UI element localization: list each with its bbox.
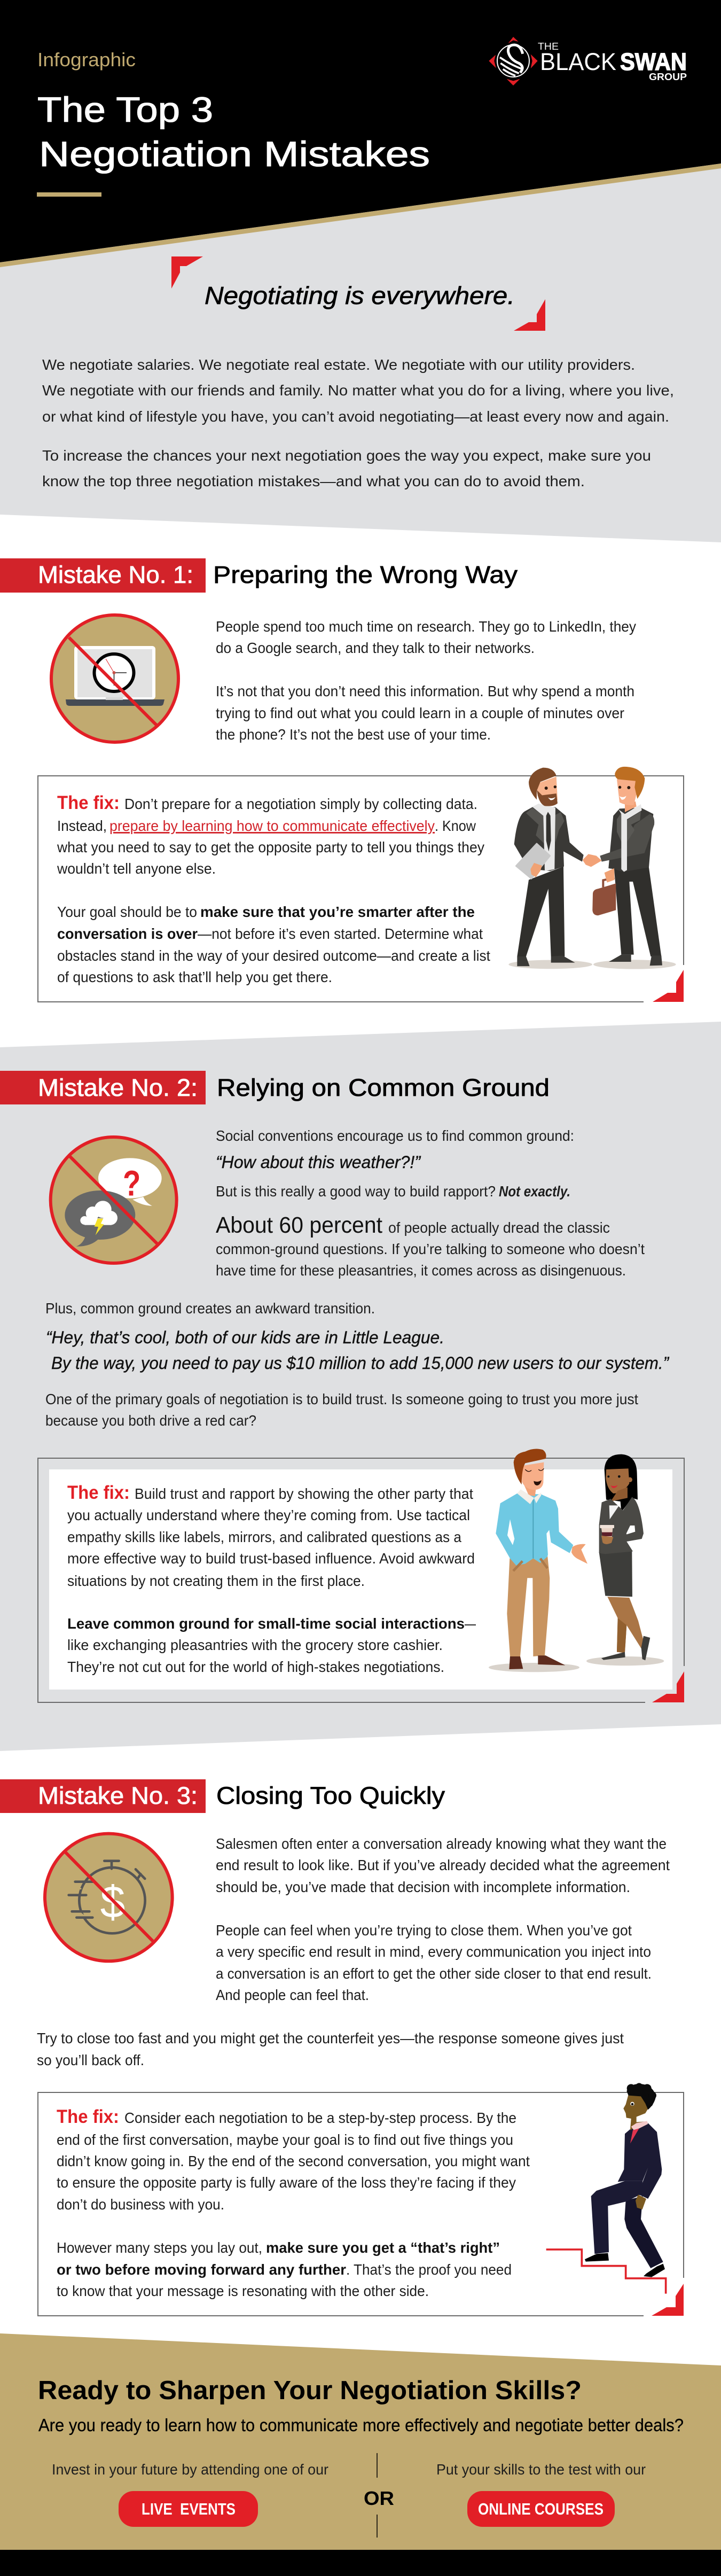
mistake 3 text: should be, you’ve made that decision with incomplete information. [216, 1879, 630, 1895]
mistake 1 text: It’s not that you don’t need this information. But why spend a month [216, 683, 634, 699]
fix 1 text [57, 792, 490, 985]
fix 1 text: obstacles stand in the way of your desired outcome—and create a list [57, 947, 490, 964]
fix 3 text: make sure you get a “that’s right” [266, 2239, 500, 2256]
mistake 3 text: Salesmen often enter a conversation already knowing what they want the [216, 1835, 667, 1852]
quote: Negotiating is everywhere: Negotiating is everywhere. [205, 282, 515, 309]
mistake 2 text: By the way, you need to pay us $10 million to add 15,000 new users to our system.” [51, 1353, 669, 1373]
intro text: know the top three negotiation mistakes—and what you can do to avoid them. [42, 473, 585, 489]
quote corner: bottom right [514, 299, 545, 331]
heading: Mistake No. 3: Closing Too Quickly [216, 1782, 445, 1809]
mistake 2 text: because you both drive a red car? [45, 1412, 256, 1429]
fix 1 text: wouldn’t tell anyone else. [57, 860, 216, 877]
mistake 3 text: a very specific end result in mind, every communication you inject into [216, 1943, 651, 1960]
panel: fix 3 [38, 2092, 684, 2316]
fix 1 text: Instead, [57, 818, 107, 834]
illustration: two businessmen shaking hands [508, 767, 676, 969]
mistake 1 text: People spend too much time on research. They go to LinkedIn, they [216, 618, 636, 635]
mistake 2 text: About 60 percent [216, 1212, 382, 1238]
fix 3 text [57, 2106, 530, 2299]
OR divider: OR [364, 2487, 394, 2509]
heading: Mistake No. 1 [0, 558, 518, 593]
logo: The Black Swan Group: BLACK [540, 48, 616, 75]
fix 3 text: The fix: [57, 2106, 119, 2127]
panel: fix 2 [38, 1458, 684, 1702]
fix 1 text: of questions to ask that’ll help you get there. [57, 969, 332, 985]
fix 3 text: to know that your message is resonating with the other side. [57, 2283, 429, 2299]
fix 3 text: end of the first conversation, maybe your goal is to find out five things you [57, 2131, 513, 2148]
icon: weather small talk crossed out [51, 1137, 177, 1263]
fix 1 text: what you need to say to get the opposite party to tell you things they [57, 839, 484, 855]
right call to action: online courses [436, 2461, 646, 2527]
title: Negotiation Mistakes [39, 134, 430, 174]
mistake 3 text: Try to close too fast and you might get the counterfeit yes—the response someone gives just [37, 2030, 624, 2046]
fix 3 text: . That’s the proof you need [346, 2261, 512, 2278]
right call to action: online courses: Put your skills to the test with our [436, 2461, 646, 2478]
illustration: man and woman talking [489, 1449, 664, 1672]
quote corner: top left [171, 256, 203, 289]
fix 1 text: Don’t prepare for a negotiation simply by collecting data. [124, 796, 477, 812]
mistake 3 text: a conversation is an effort to get the other side closer to that end result. [216, 1965, 652, 1982]
heading: Mistake No. 2 [0, 1071, 550, 1104]
fix 2 text: Build trust and rapport by showing the other party that [135, 1485, 473, 1502]
panel: fix 1 [38, 776, 684, 1002]
fix 2 text: more effective way to build trust-based influence. Avoid awkward [67, 1550, 475, 1567]
logo: The Black Swan Group [489, 37, 687, 85]
fix 1 text: The fix: [57, 792, 120, 813]
fix 1 text: . Know [435, 818, 476, 834]
heading: Mistake No. 1: Preparing the Wrong Way [213, 561, 518, 588]
title [37, 90, 430, 174]
fix 1 text: make sure that you’re smarter after the [200, 904, 475, 920]
icon: weather small talk crossed out: ? [123, 1164, 140, 1203]
mistake 1 text: do a Google search, and they talk to their networks. [216, 640, 535, 656]
mistake 2 text: “Hey, that’s cool, both of our kids are in Little League. [46, 1328, 444, 1347]
fix 2 text: Leave common ground for small-time social interactions [67, 1615, 465, 1632]
logo: The Black Swan Group: SWAN [620, 48, 687, 75]
fix 2 text: empathy skills like labels, mirrors, and calibrated questions as a [67, 1529, 461, 1545]
fix 3 text: to ensure the opposite party is fully aware of the loss they’re facing if they [57, 2174, 516, 2191]
heading: Mistake No. 2: Mistake No. 2: [38, 1074, 198, 1101]
mistake 2 text: of people actually dread the classic [388, 1219, 610, 1236]
footer bar [0, 2550, 721, 2576]
left call to action: live events: Invest in your future by attending one of our [52, 2461, 328, 2478]
fix 1 text: —not before it’s even started. Determine what [198, 925, 483, 942]
fix 3 text: don’t do business with you. [57, 2196, 224, 2213]
heading: Mistake No. 2: Relying on Common Ground [217, 1074, 550, 1101]
mistake 3 text [37, 1835, 670, 2068]
mistake 2 text [45, 1127, 669, 1429]
mistake 3 text: People can feel when you’re trying to close them. When you’ve got [216, 1922, 632, 1939]
panel: intro grey background [0, 160, 721, 542]
mistake 2 text: One of the primary goals of negotiation is to build trust. Is someone going to trust you more just [45, 1391, 638, 1407]
mistake 2 text: Plus, common ground creates an awkward transition. [45, 1300, 375, 1317]
fix 2 text: They’re not cut out for the world of high-stakes negotiations. [67, 1659, 444, 1675]
mistake 3 text: end result to look like. But if you’ve already decided what the agreement [216, 1857, 670, 1873]
mistake 2 text: common-ground questions. If you’re talking to someone who doesn’t [216, 1241, 645, 1257]
intro text: We negotiate with our friends and family. No matter what you do for a living, where you live, [42, 382, 674, 399]
heading: Mistake No. 3 [0, 1779, 445, 1813]
icon: stopwatch with dollar crossed out [45, 1834, 173, 1961]
intro text [42, 356, 674, 489]
fix 1 text: prepare by learning how to communicate effectively [109, 818, 435, 834]
left call to action: live events [52, 2461, 328, 2527]
fix 3 text: didn’t know going in. By the end of the second conversation, you might want [57, 2153, 530, 2169]
mistake 1 text: the phone? It’s not the best use of your time. [216, 726, 491, 743]
fix 2 text: you actually understand where they’re coming from. Use tactical [67, 1507, 470, 1523]
intro text: We negotiate salaries. We negotiate real estate. We negotiate with our utility providers. [42, 356, 635, 373]
header black banner [0, 0, 721, 267]
fix 1 text: conversation is over [57, 925, 198, 942]
heading: Mistake No. 3: Mistake No. 3: [38, 1782, 198, 1809]
panel: call to action gold background [0, 2333, 721, 2550]
left call to action: live events: LIVE EVENTS [142, 2500, 236, 2518]
intro text: or what kind of lifestyle you have, you can’t avoid negotiating—at least every now and again. [42, 408, 669, 425]
mistake 2 text: have time for these pleasantries, it comes across as disingenuous. [216, 1262, 626, 1279]
logo: The Black Swan Group: THE [538, 41, 559, 52]
mistake 1 text: trying to find out what you could learn in a couple of minutes over [216, 705, 624, 721]
mistake 1 text [216, 618, 636, 743]
fix 2 text: like exchanging pleasantries with the grocery store cashier. [67, 1637, 443, 1653]
mistake 3 text: And people can feel that. [216, 1987, 369, 2003]
call to action heading: Ready to Sharpen Your Negotiation Skills? [38, 2376, 582, 2405]
mistake 3 text: so you’ll back off. [37, 2052, 144, 2068]
mistake 2 text: Not exactly. [499, 1183, 570, 1200]
eyebrow: Infographic: Infographic [37, 49, 136, 71]
fix 2 text: The fix: [67, 1482, 130, 1503]
panel: mistake 2 grey background [0, 1022, 721, 1751]
fix 2 text [67, 1482, 476, 1675]
mistake 2 text: But is this really a good way to build rapport? [216, 1183, 496, 1200]
fix 2 text: situations by not creating them in the first place. [67, 1573, 365, 1589]
call to action subheading: Are you ready to learn how to communicate more effectively and negotiate better deals? [38, 2415, 684, 2435]
fix 2 text: — [465, 1615, 476, 1632]
illustration: man climbing stairs [546, 2083, 666, 2294]
right call to action: online courses: ONLINE COURSES [478, 2500, 604, 2518]
fix 3 text: or two before moving forward any further [57, 2261, 346, 2278]
icon: laptop clock crossed out [51, 615, 178, 742]
fix 1 text: Your goal should be to [57, 904, 197, 920]
mistake 2 text: Social conventions encourage us to find common ground: [216, 1127, 574, 1144]
icon: stopwatch with dollar crossed out: $ [100, 1877, 125, 1927]
fix 3 text: However many steps you lay out, [57, 2239, 262, 2256]
intro text: To increase the chances your next negotiation goes the way you expect, make sure you [42, 447, 651, 464]
title rule [37, 192, 101, 197]
fix 3 text: Consider each negotiation to be a step-by-step process. By the [124, 2110, 516, 2126]
title: The Top 3 [37, 90, 213, 129]
heading: Mistake No. 1: Mistake No. 1: [38, 561, 193, 588]
logo: The Black Swan Group: GROUP [649, 72, 687, 82]
mistake 2 text: “How about this weather?!” [216, 1153, 421, 1172]
